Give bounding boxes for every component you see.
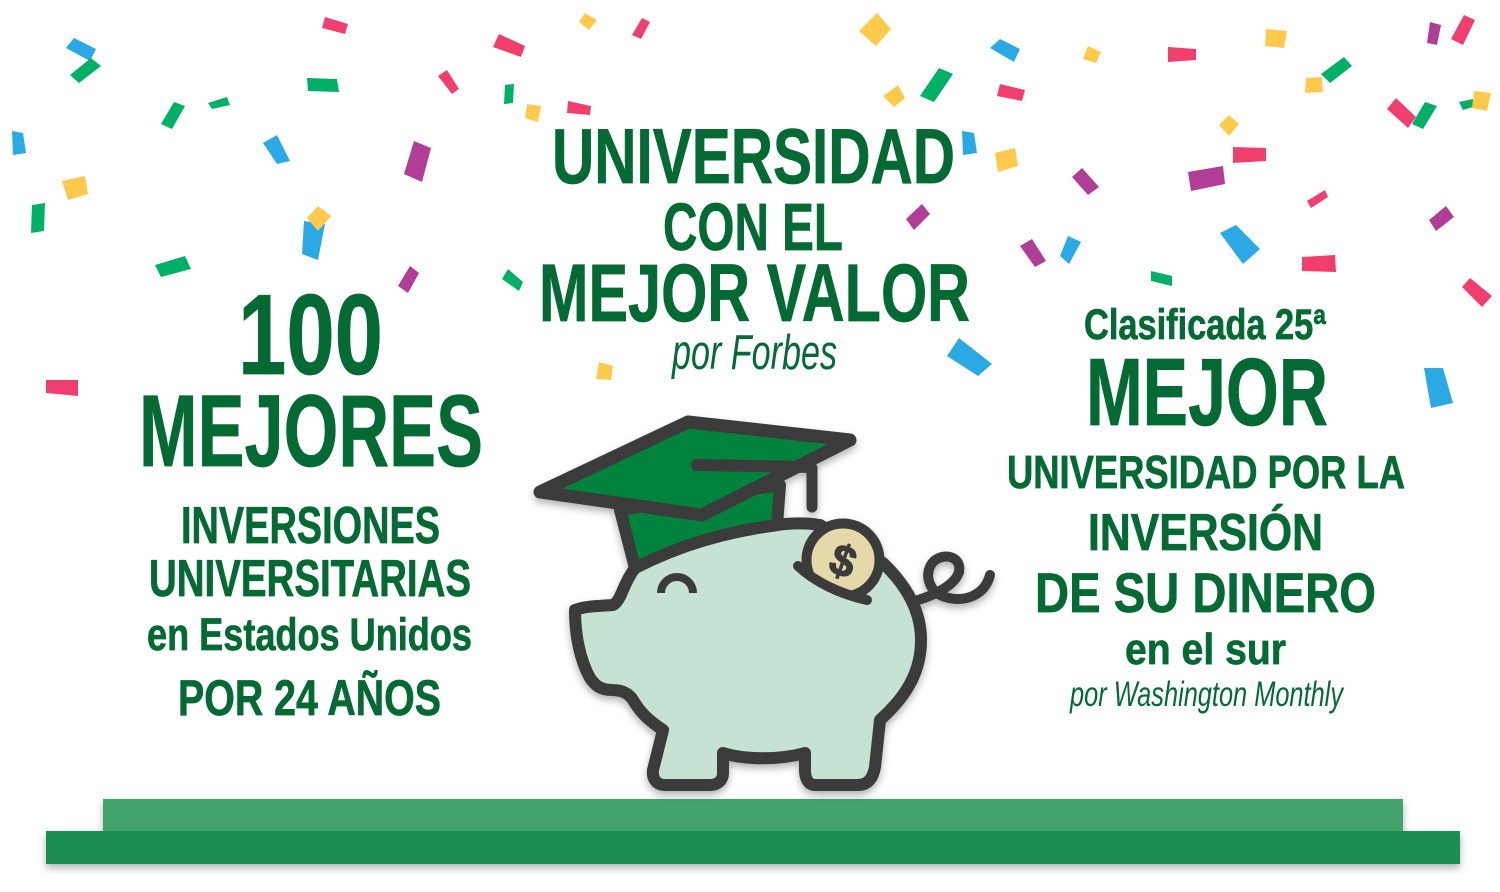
cap band (620, 485, 780, 568)
icon: piggy bank with graduation cap and coin (540, 422, 990, 785)
heading line: MEJOR (1086, 339, 1328, 446)
source: por Forbes (671, 326, 837, 380)
big number: 100 (238, 272, 383, 399)
text block: centre award (539, 112, 970, 380)
cap tassel (806, 468, 818, 507)
line: INVERSIONES (181, 497, 440, 555)
coin slot (798, 566, 867, 600)
line: INVERSIÓN (1088, 504, 1323, 562)
heading line: MEJOR VALOR (539, 248, 970, 339)
line: en Estados Unidos (147, 609, 472, 660)
dollar sign: $ (823, 534, 863, 589)
source: por Washington Monthly (1069, 675, 1345, 714)
line: UNIVERSIDAD POR LA (1007, 446, 1405, 498)
pig eye (661, 577, 693, 593)
line: DE SU DINERO (1035, 561, 1376, 624)
coin (806, 524, 880, 596)
cap board (540, 422, 850, 515)
heading line: UNIVERSIDAD (552, 112, 955, 200)
heading line: CON EL (663, 190, 843, 265)
text block: left award (139, 272, 483, 726)
line: UNIVERSITARIAS (149, 550, 471, 608)
line: en el sur (1125, 625, 1286, 674)
heading line: MEJORES (139, 374, 483, 488)
text block: right award (1007, 301, 1405, 714)
line: Clasificada 25ª (1084, 301, 1326, 349)
pig body (575, 524, 921, 785)
cap strap (697, 465, 810, 467)
line: POR 24 AÑOS (178, 670, 441, 726)
confetti (12, 13, 1492, 408)
panel: stepped podium (46, 799, 1460, 864)
pig tail (918, 557, 990, 600)
